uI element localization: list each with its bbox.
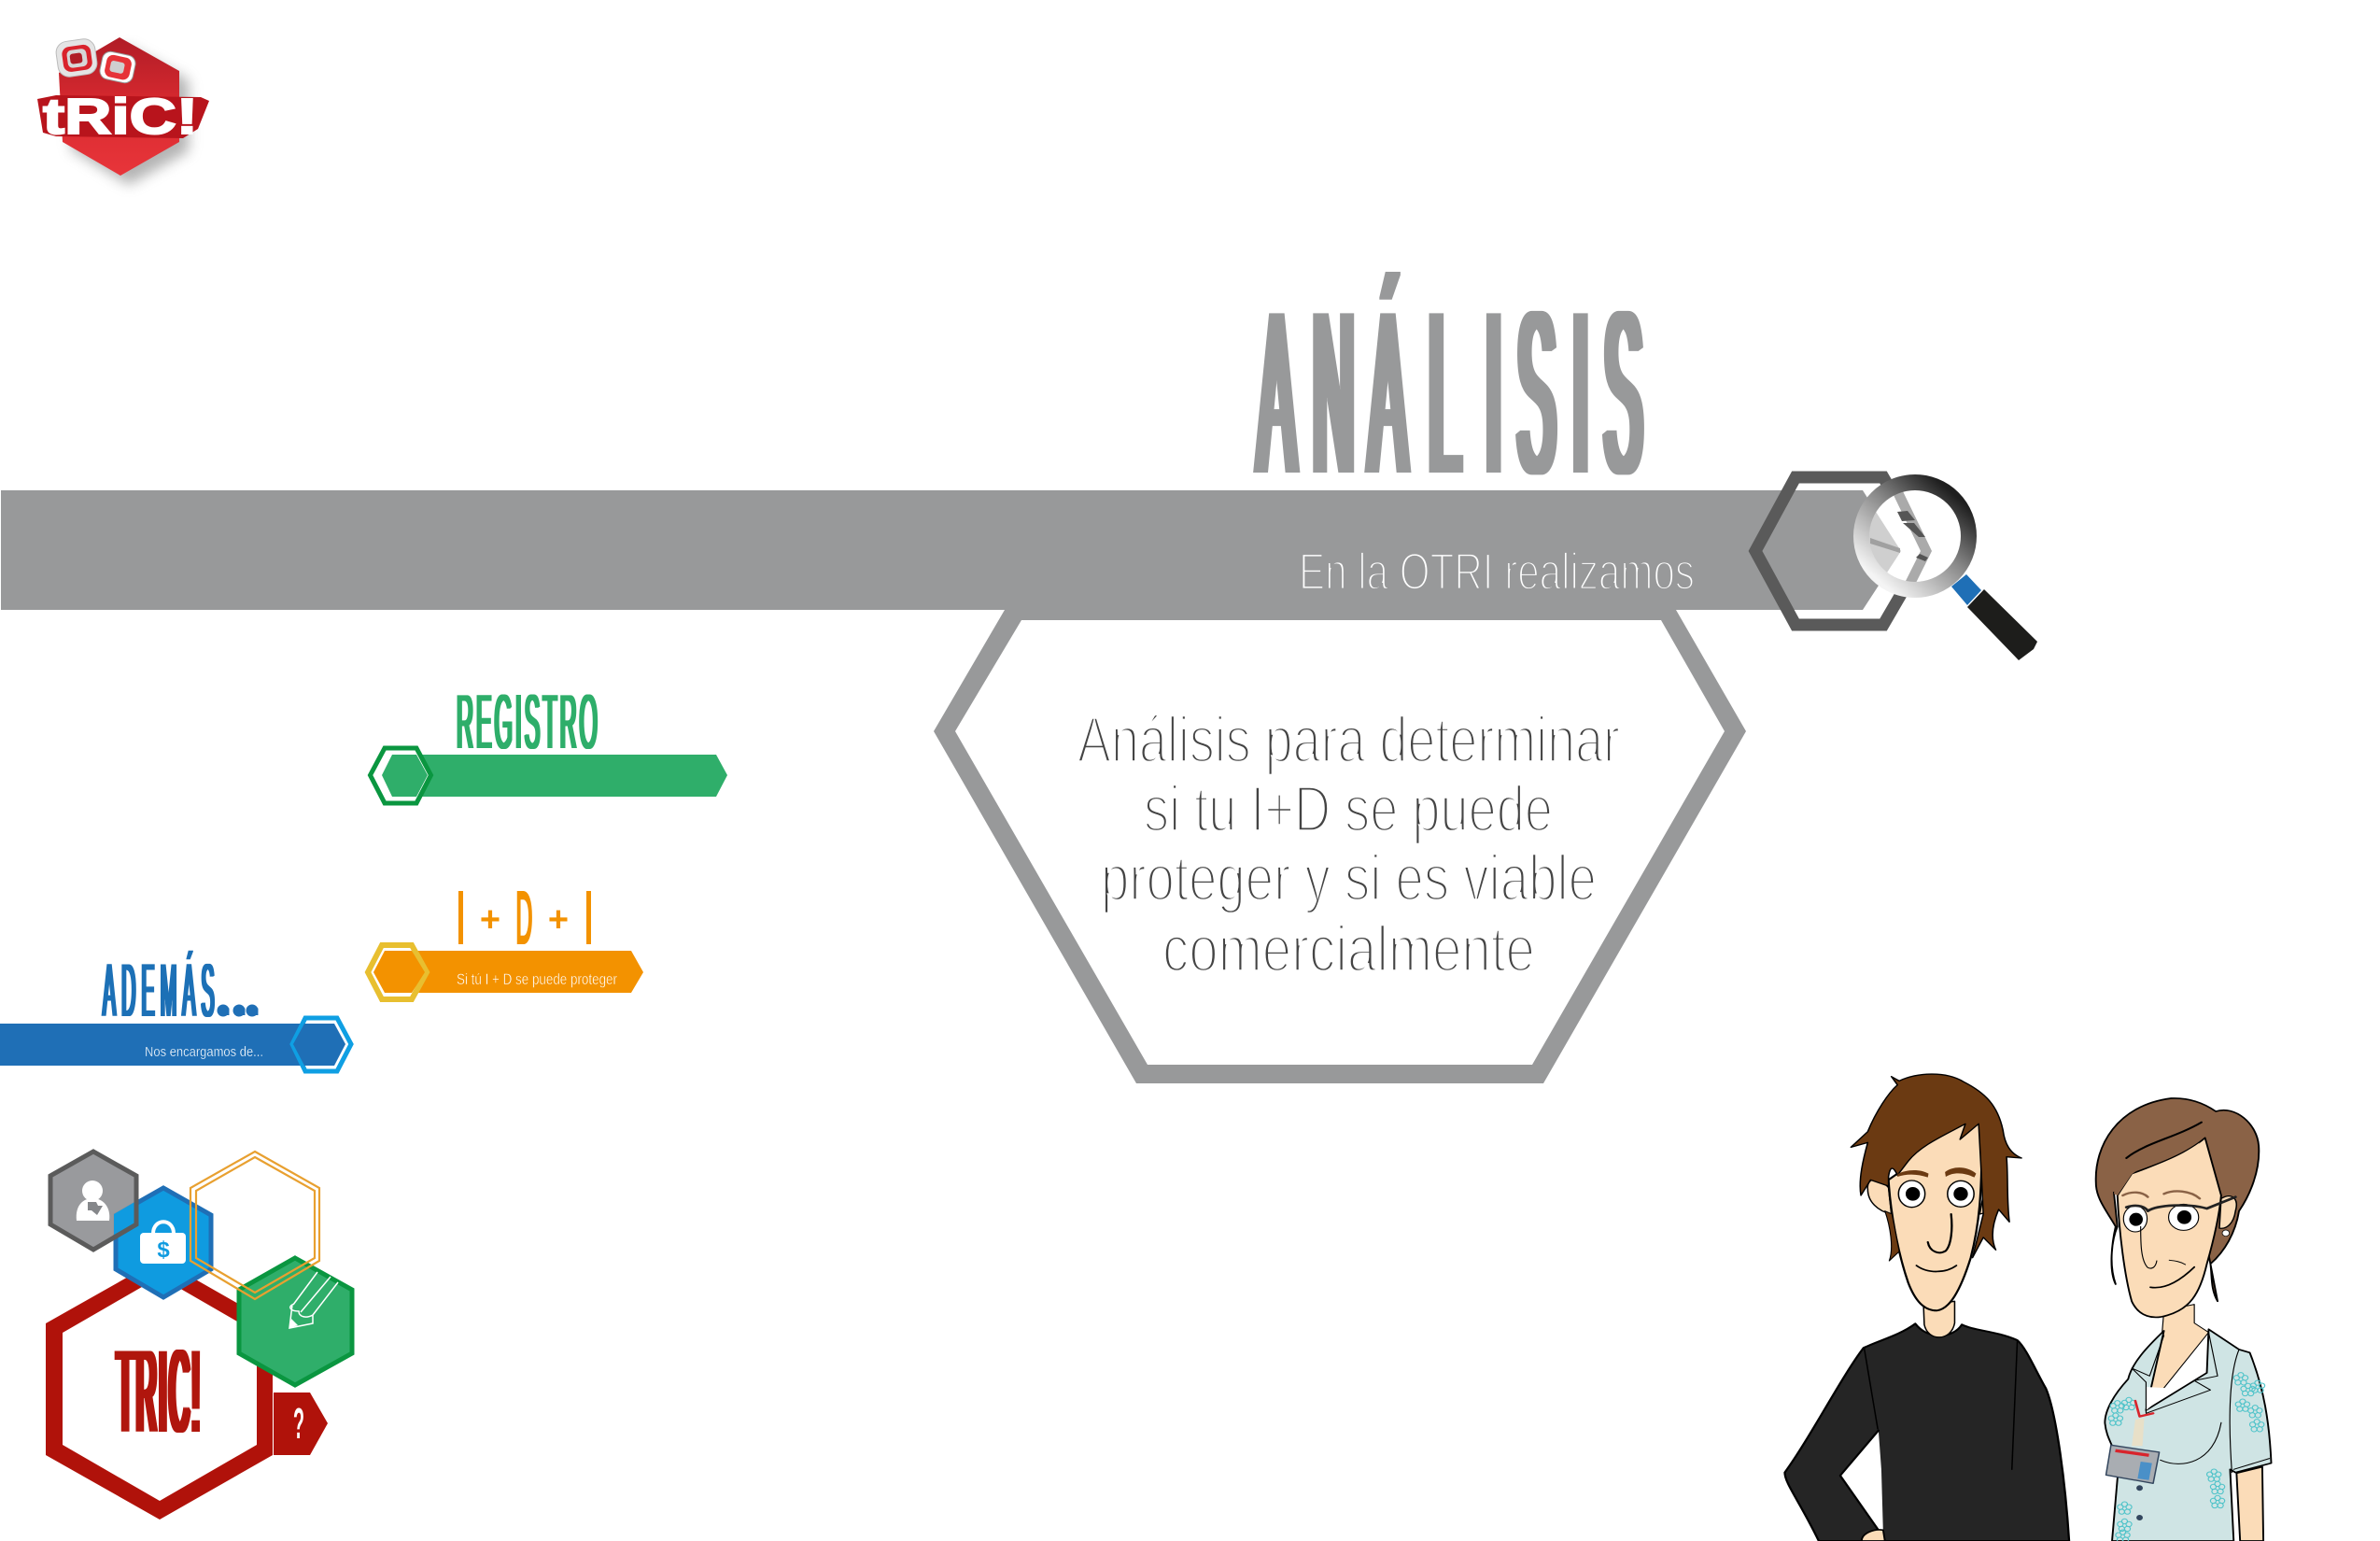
heading: D (515, 874, 533, 961)
heading (458, 874, 591, 961)
hexagon: red TRIC! (46, 1259, 273, 1520)
description text: Análisis para determinar (1077, 703, 1620, 776)
character: woman (2096, 1098, 2272, 1541)
hexagon: person (50, 1152, 136, 1250)
panel: main grey banner (1, 490, 1901, 610)
description text: proteger y si es viable (1101, 841, 1597, 914)
character: man (1784, 1074, 2069, 1541)
section: I+D+I (368, 874, 643, 999)
description text: comercialmente (1162, 912, 1535, 985)
heading: + (480, 900, 500, 940)
heading: ADEMÁS (103, 947, 215, 1033)
description text (1077, 703, 1620, 985)
label: Nos encargamos de... (145, 1044, 263, 1060)
heading: + (548, 900, 569, 940)
logo: TRIC!: tRiC! (43, 89, 198, 145)
description text: si tu I+D se puede (1144, 772, 1553, 845)
hexagon: red TRIC!: TRIC! (117, 1328, 200, 1458)
banner subtitle: En la OTRI realizamos (1299, 542, 1695, 601)
heading: ... (219, 973, 261, 1025)
icon: magnifying glass (1858, 482, 2037, 660)
icon: banner hexagon outline (1755, 477, 1926, 625)
logo: TRIC! (37, 37, 209, 185)
illustration: characters (1784, 1074, 2272, 1541)
section: ADEMÁS (0, 947, 351, 1071)
panel: hexagon with description (934, 610, 1746, 1083)
hexagon: briefcase (116, 1188, 211, 1297)
heading: REGISTRO (457, 678, 598, 765)
hexagon cluster (46, 1152, 352, 1520)
section: REGISTRO (370, 678, 727, 803)
hexagon: pencil (239, 1258, 352, 1385)
title: ANÁLISIS: ANÁLISIS (1258, 264, 1642, 523)
hexagon: briefcase: $ (157, 1237, 170, 1263)
hexagon: orange outline (190, 1152, 319, 1299)
label: Si tú I + D se puede proteger (457, 970, 617, 988)
tag: question mark: ? (293, 1399, 304, 1448)
tag: question mark (274, 1393, 328, 1455)
